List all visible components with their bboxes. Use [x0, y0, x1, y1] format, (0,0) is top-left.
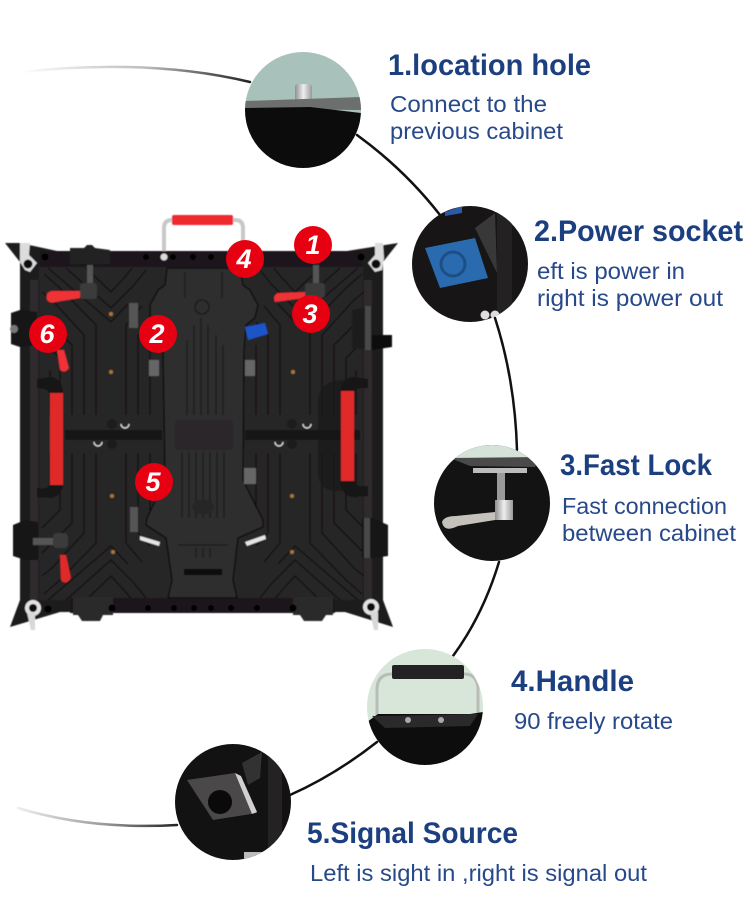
- cross bars: [65, 419, 360, 449]
- connecting arc: [18, 67, 517, 826]
- feature 2 text: eft is power in: [537, 258, 685, 284]
- feature 3 text: [560, 449, 737, 546]
- feature 5 text: [307, 817, 648, 886]
- badge 5: 5: [145, 467, 161, 497]
- detail circle 2: power socket: [410, 204, 530, 325]
- badge 6: 6: [39, 319, 55, 349]
- feature 2 text: [534, 215, 743, 311]
- badge 6: [29, 315, 67, 353]
- badge 4: [226, 240, 264, 278]
- small fittings: [109, 303, 295, 554]
- feature 4 text: [511, 665, 673, 734]
- feature 1 text: previous cabinet: [390, 118, 564, 144]
- badge 3: [292, 295, 330, 333]
- detail circle 5: signal source: [175, 744, 291, 860]
- feature 4 text: 4.Handle: [511, 665, 634, 698]
- feature 3 text: Fast connection: [562, 493, 727, 519]
- badge 4: 4: [235, 244, 252, 274]
- feature 2 text: right is power out: [537, 285, 724, 311]
- badge 2: [139, 315, 177, 353]
- feature 1 text: Connect to the: [390, 91, 547, 117]
- detail circle 4: handle: [365, 648, 485, 770]
- central spine: [146, 268, 263, 598]
- frame: [5, 243, 398, 627]
- feature 2 text: 2.Power socket: [534, 215, 743, 248]
- feature 5 text: 5.Signal Source: [307, 817, 518, 850]
- levers and knobs: [33, 265, 325, 583]
- feature 1 text: 1.location hole: [388, 49, 591, 82]
- feature 3 text: between cabinet: [562, 520, 737, 546]
- badge 1: [294, 226, 332, 264]
- feature 1 text: [388, 49, 591, 144]
- top handle: [164, 215, 243, 252]
- side handles: [37, 377, 368, 498]
- feature 4 text: 90 freely rotate: [514, 708, 673, 734]
- badge 2: 2: [148, 319, 165, 349]
- spine ribs: [178, 272, 228, 558]
- corner brackets: [20, 243, 384, 630]
- badge 3: 3: [302, 299, 318, 329]
- side clamps: [10, 306, 392, 560]
- detail circle 3: fast lock: [434, 445, 550, 561]
- detail circle 1: location hole: [245, 52, 361, 168]
- badge 5: [135, 463, 173, 501]
- blue power connector: [245, 323, 268, 340]
- top and bottom rails: [40, 245, 364, 621]
- feature 3 text: 3.Fast Lock: [560, 449, 712, 482]
- cabinet back panel: [5, 215, 398, 630]
- feature 5 text: Left is sight in ,right is signal out: [310, 860, 648, 886]
- chevron relief lines: [42, 268, 364, 600]
- badge 1: 1: [305, 230, 321, 260]
